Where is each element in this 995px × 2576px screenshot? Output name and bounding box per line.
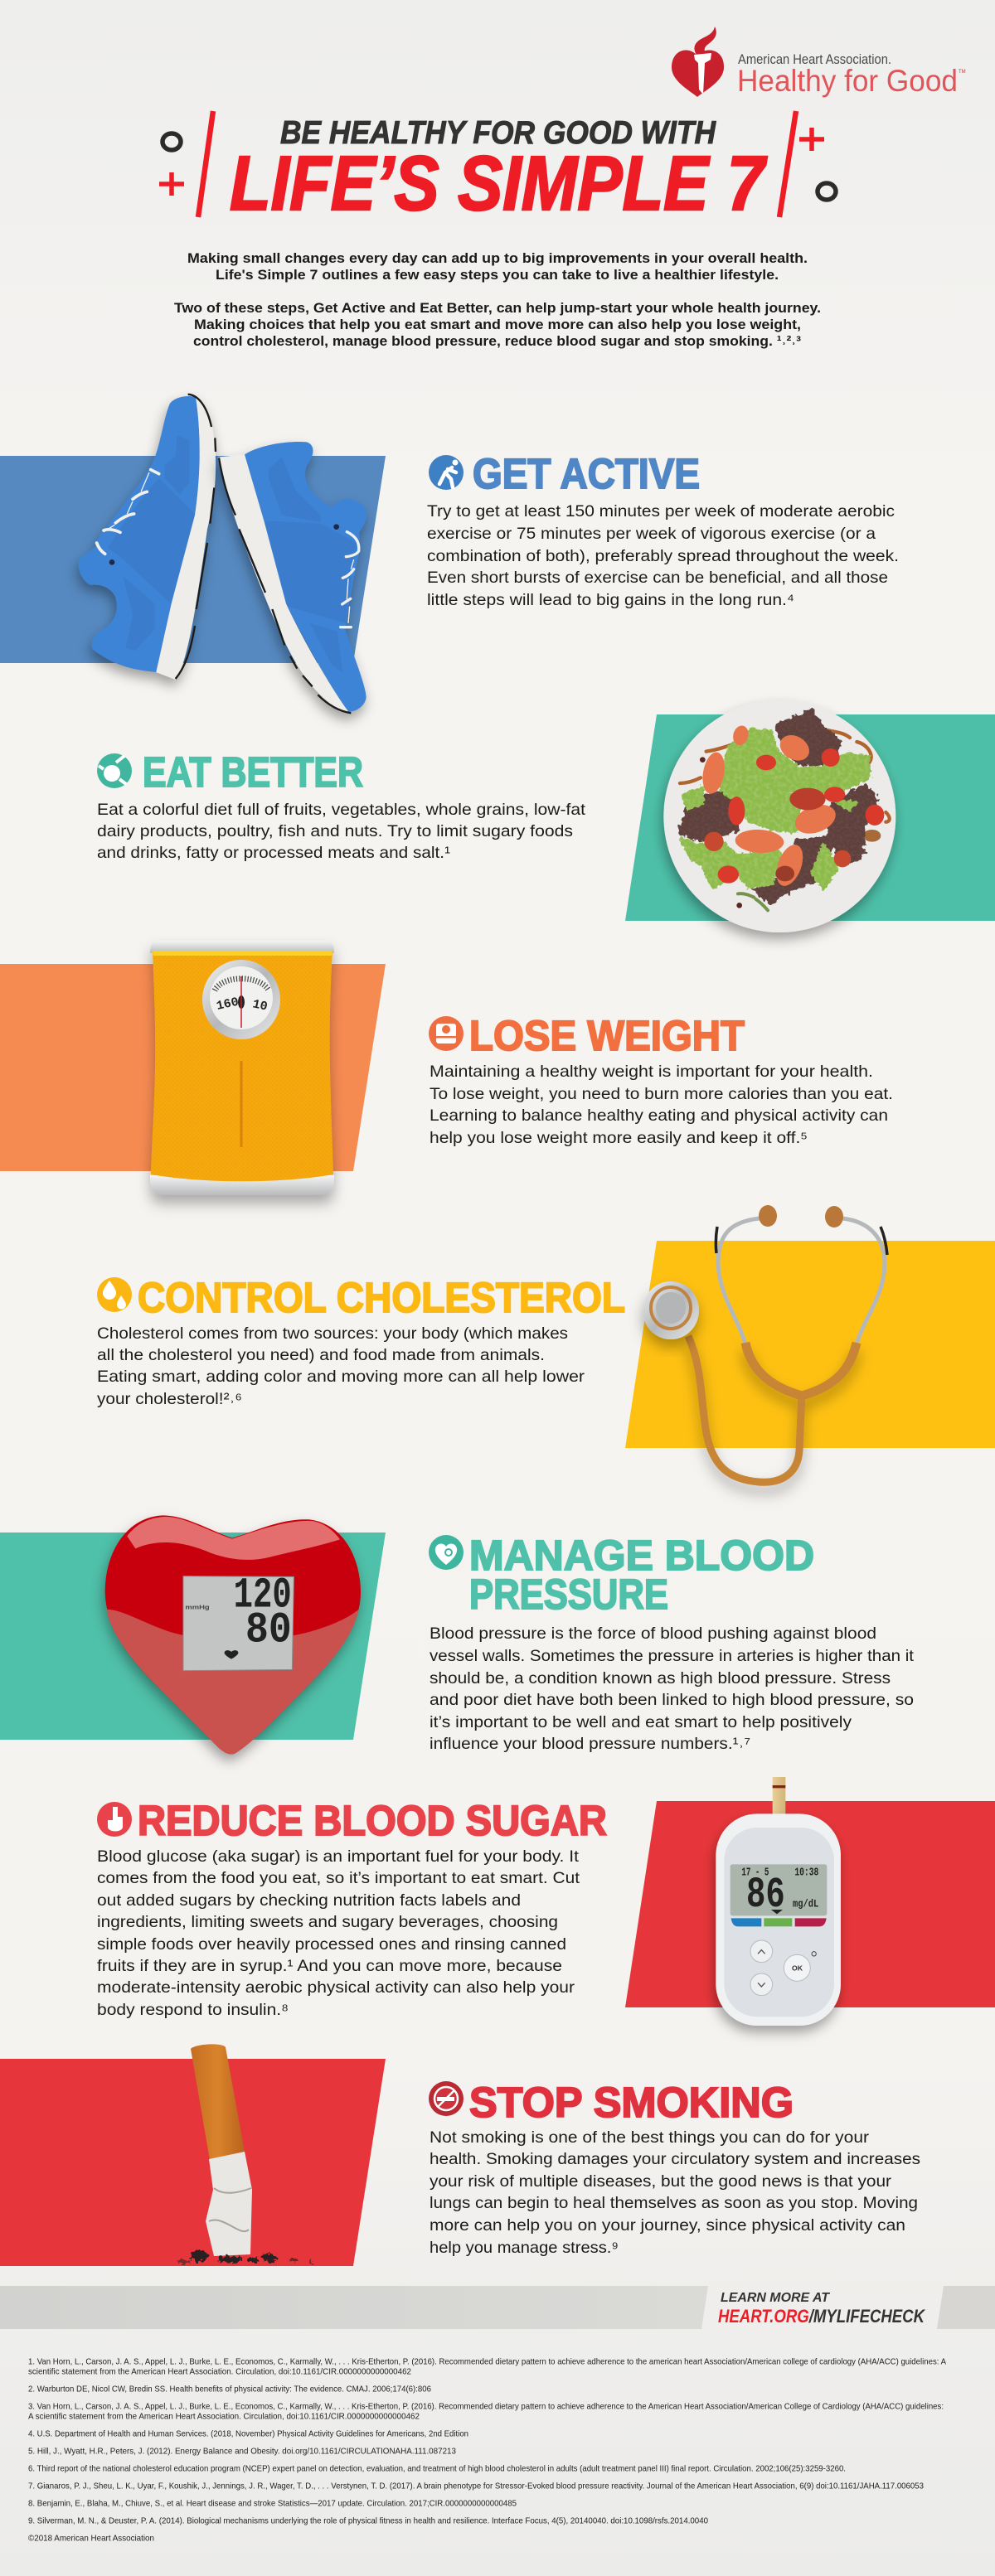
meter body — [716, 1813, 841, 2026]
references: scientific statement from the American Heart Association. Circulation, doi:10.1161/CIR.0000000000000462 — [28, 2367, 411, 2377]
title line 1: BE HEALTHY FOR GOOD WITH — [280, 115, 716, 151]
references: 5. Hill, J., Wyatt, H.R., Peters, J. (2012). Energy Balance and Obesity. doi.org/10.1161/CIRCULATIONAHA.111.087213 — [28, 2447, 456, 2457]
garnish — [738, 893, 768, 910]
grey band left — [0, 2286, 708, 2329]
illustration: stethoscope — [643, 1205, 887, 1482]
body text: help you lose weight more easily and keep it off.⁵ — [430, 1129, 808, 1147]
dial: 160 — [216, 995, 240, 1014]
logo: American Heart Association Healthy for Good: TM — [959, 70, 966, 75]
left shoe — [79, 395, 216, 680]
chest piece — [643, 1281, 699, 1339]
illustration: blue running shoes — [79, 395, 366, 714]
decorative symbol: right plus — [799, 128, 824, 151]
buttons — [750, 1940, 816, 1996]
dial: 10 — [251, 997, 269, 1014]
illustration: glucose meter — [716, 1777, 841, 2026]
body text: comes from the food you eat, so it’s important to eat smart. Cut — [97, 1869, 580, 1887]
body text — [97, 801, 586, 862]
illustration: glucose meter: mg/dL — [793, 1899, 818, 1911]
test strip — [773, 1777, 785, 1821]
learn more label: LEARN MORE AT — [721, 2291, 830, 2305]
illustration: salad plate — [663, 700, 896, 932]
colour band — [0, 964, 386, 1171]
heading: EAT BETTER — [143, 748, 363, 796]
intro text: Making choices that help you eat smart and move more can also help you lose weight, — [194, 317, 801, 332]
right slash — [779, 111, 796, 217]
decorative symbol: left plus — [159, 172, 184, 196]
systolic reading: 120 — [234, 1571, 292, 1620]
body text: dairy products, poultry, fish and nuts. Try to limit sugary foods — [97, 822, 573, 840]
body text: exercise or 75 minutes per week of vigorous exercise (or a — [427, 525, 876, 543]
intro text: Life's Simple 7 outlines a few easy steps you can take to live a healthier lifestyle. — [216, 268, 779, 283]
glucose reading: 86 — [746, 1871, 785, 1920]
body text: out added sugars by checking nutrition facts labels and — [97, 1891, 521, 1910]
body text: more can help you on your journey, since physical activity can — [430, 2216, 905, 2235]
body text: Cholesterol comes from two sources: your body (which makes — [97, 1324, 568, 1343]
references: A scientific statement from the American Heart Association. Circulation, doi:10.1161/CIR.0000000000000462 — [28, 2412, 420, 2422]
dark lettuce — [682, 713, 876, 901]
metal tubes — [718, 1218, 885, 1344]
body text — [427, 502, 899, 609]
body text: lungs can begin to heal themselves as soon as you stop. Moving — [430, 2194, 918, 2212]
colour band — [0, 1533, 386, 1740]
logo: American Heart Association Healthy for Good — [672, 27, 966, 98]
tomatoes — [704, 748, 884, 884]
panel: eat better — [97, 700, 995, 932]
body text: and poor diet have both been linked to high blood pressure, so — [430, 1691, 914, 1709]
icon: heart and torch — [672, 27, 724, 97]
body text — [97, 1847, 580, 2019]
lower reflection — [106, 1610, 359, 1755]
centre groove — [240, 1061, 242, 1147]
references: 4. U.S. Department of Health and Human Services. (2018, November) Physical Activity Guidelines for Americans, 2nd Edition — [28, 2428, 468, 2438]
panel: manage blood pressure — [0, 1515, 915, 1755]
buttons: OK — [792, 1964, 803, 1973]
body text: your risk of multiple diseases, but the good news is that your — [430, 2172, 892, 2191]
organisation name: American Heart Association. — [738, 51, 891, 67]
body text: Learning to balance healthy eating and physical activity can — [430, 1106, 888, 1125]
body text — [97, 1324, 585, 1408]
body text: health. Smoking damages your circulatory system and increases — [430, 2150, 920, 2168]
decorative symbol: right circle — [818, 183, 836, 200]
body text: Try to get at least 150 minutes per week of moderate aerobic — [427, 502, 895, 521]
icon: no smoking — [429, 2081, 464, 2116]
body text: should be, a condition known as high blood pressure. Stress — [430, 1669, 891, 1687]
body text: simple foods over heavily processed ones and rinsing canned — [97, 1935, 566, 1954]
body text — [430, 1625, 915, 1753]
body text: little steps will lead to big gains in the long run.⁴ — [427, 591, 794, 609]
plate — [663, 700, 896, 932]
colour scale — [731, 1918, 761, 1926]
illustration: stubbed cigarette — [177, 2044, 313, 2264]
colour band — [0, 2059, 386, 2266]
filter — [191, 2044, 245, 2160]
illustration: heart blood pressure monitor — [105, 1515, 361, 1755]
ear tips — [759, 1205, 777, 1227]
references: 6. Third report of the national cholesterol education program (NCEP) expert panel on detection, evaluation, and treatment of high blood cholesterol in adults (adult treatment panel III) final report. Circulation. 2002;106(25):3259-3260. — [28, 2463, 846, 2473]
intro text — [174, 251, 821, 349]
panel: control cholesterol — [97, 1205, 995, 1482]
body text: fruits if they are in syrup.¹ And you can move more, because — [97, 1957, 562, 1975]
panel: get active — [0, 395, 899, 714]
illustration: glucose meter: 17 - 5 — [741, 1867, 769, 1880]
references: ©2018 American Heart Association — [28, 2533, 154, 2543]
heading: REDUCE BLOOD SUGAR — [138, 1797, 607, 1844]
heading: MANAGE BLOOD — [469, 1532, 814, 1579]
ash — [177, 2250, 313, 2264]
rubber tubing — [688, 1336, 857, 1482]
heading: CONTROL CHOLESTEROL — [138, 1274, 625, 1321]
illustration: bathroom scale — [150, 941, 334, 1195]
LCD screen — [730, 1864, 827, 1915]
unit label: mmHg — [185, 1605, 210, 1610]
references: 8. Benjamin, E., Blaha, M., Chiuve, S., et al. Heart disease and stroke Statistics—2017 update. Circulation. 2017;CIR.0000000000000485 — [28, 2498, 517, 2508]
body text: Eating smart, adding color and moving more can all help lower — [97, 1368, 585, 1386]
salmon rolls — [700, 724, 840, 889]
scale body — [150, 941, 334, 1195]
Healthy for Good wordmark: Healthy for Good — [737, 64, 958, 98]
colour band — [625, 1241, 995, 1448]
dial — [202, 960, 280, 1039]
body text: it’s important to be well and eat smart to help positively — [430, 1713, 852, 1731]
body text: Blood pressure is the force of blood pushing against blood — [430, 1625, 876, 1643]
body text — [430, 1063, 893, 1147]
references: 9. Silverman, M. N., & Deuster, P. A. (2014). Biological mechanisms underlying the role of physical fitness in health and resilience. Interface Focus, 4(5), 20140040. doi:10.1098/rsfs.2014.0040 — [28, 2516, 708, 2526]
body text: help you manage stress.⁹ — [430, 2239, 619, 2257]
grey band right — [937, 2286, 995, 2329]
body text: all the cholesterol you need) and food made from animals. — [97, 1346, 545, 1364]
dressing — [680, 729, 890, 822]
colour band — [625, 1801, 995, 2007]
body text: influence your blood pressure numbers.¹˒⁷ — [430, 1735, 750, 1753]
icon: fruit — [97, 753, 132, 788]
right shoe — [218, 442, 366, 714]
left slash — [198, 111, 213, 217]
paper — [206, 2152, 252, 2256]
heading — [469, 1532, 814, 1618]
intro text: Making small changes every day can add up to big improvements in your overall health. — [187, 251, 808, 266]
body text: ingredients, limiting sweets and sugary beverages, choosing — [97, 1913, 558, 1931]
body text: Not smoking is one of the best things you can do for your — [430, 2128, 870, 2147]
heading: PRESSURE — [469, 1571, 668, 1618]
body text: Maintaining a healthy weight is important for your health. — [430, 1063, 873, 1081]
heading: GET ACTIVE — [473, 450, 700, 497]
LCD screen — [183, 1576, 294, 1671]
intro text: Two of these steps, Get Active and Eat Better, can help jump-start your whole health journey. — [174, 301, 821, 316]
body text: To lose weight, you need to burn more calories than you eat. — [430, 1085, 893, 1103]
heading: LOSE WEIGHT — [469, 1012, 745, 1059]
heart shape — [105, 1515, 361, 1755]
green lettuce — [682, 729, 869, 889]
body text: vessel walls. Sometimes the pressure in arteries is higher than it — [430, 1647, 915, 1665]
icon: scale — [429, 1016, 464, 1051]
panel: reduce blood sugar — [97, 1777, 995, 2026]
top highlight — [127, 1517, 340, 1560]
body text: body respond to insulin.⁸ — [97, 2001, 289, 2019]
body text: Even short bursts of exercise can be beneficial, and all those — [427, 569, 888, 587]
icon: finger prick — [97, 1802, 132, 1837]
title line 2: LIFE’S SIMPLE 7 — [230, 140, 768, 226]
references: 7. Gianaros, P. J., Sheu, L. K., Uyar, F., Koushik, J., Jennings, J. R., Wager, T. D., . . . Verstynen, T. D. (2017). A brain phenotype for Stressor-Evoked blood pressure reactivity. Journal of the American Heart Association, 6(9) doi:10.1161/JAHA.117.006053 — [28, 2482, 924, 2491]
body text: Eat a colorful diet full of fruits, vegetables, whole grains, low-fat — [97, 801, 586, 819]
icon: runner — [429, 455, 464, 490]
call to action band — [0, 2286, 995, 2329]
panel: lose weight — [0, 941, 893, 1195]
diastolic reading: 80 — [245, 1606, 292, 1655]
body text: and drinks, fatty or processed meats and salt.¹ — [97, 844, 451, 862]
icon: heart and stethoscope — [429, 1535, 464, 1570]
heading: STOP SMOKING — [469, 2079, 794, 2126]
body text: Blood glucose (aka sugar) is an important fuel for your body. It — [97, 1847, 580, 1866]
body text — [430, 2128, 920, 2257]
link: heart.org/mylifecheck: HEART.ORG/MYLIFECHECK — [718, 2306, 926, 2327]
pulse heart — [225, 1650, 238, 1659]
body text: combination of both), preferably spread throughout the week. — [427, 547, 899, 565]
decorative symbol: left circle — [163, 133, 181, 150]
body text: your cholesterol!²˒⁶ — [97, 1390, 242, 1408]
references — [28, 2357, 946, 2543]
body text: moderate-intensity aerobic physical activity can also help your — [97, 1978, 575, 1997]
colour band — [0, 456, 386, 663]
title block — [159, 111, 836, 226]
intro text: control cholesterol, manage blood pressure, reduce blood sugar and stop smoking. ¹˒²˒³ — [193, 334, 802, 349]
colour band — [625, 714, 995, 921]
references: 2. Warburton DE, Nicol CW, Bredin SS. Health benefits of physical activity: The evidence. CMAJ. 2006;174(6):806 — [28, 2384, 431, 2394]
icon: drops — [97, 1277, 132, 1312]
illustration: glucose meter: 10:38 — [794, 1867, 818, 1880]
ear clips — [716, 1227, 887, 1255]
panel: stop smoking — [0, 2044, 920, 2266]
